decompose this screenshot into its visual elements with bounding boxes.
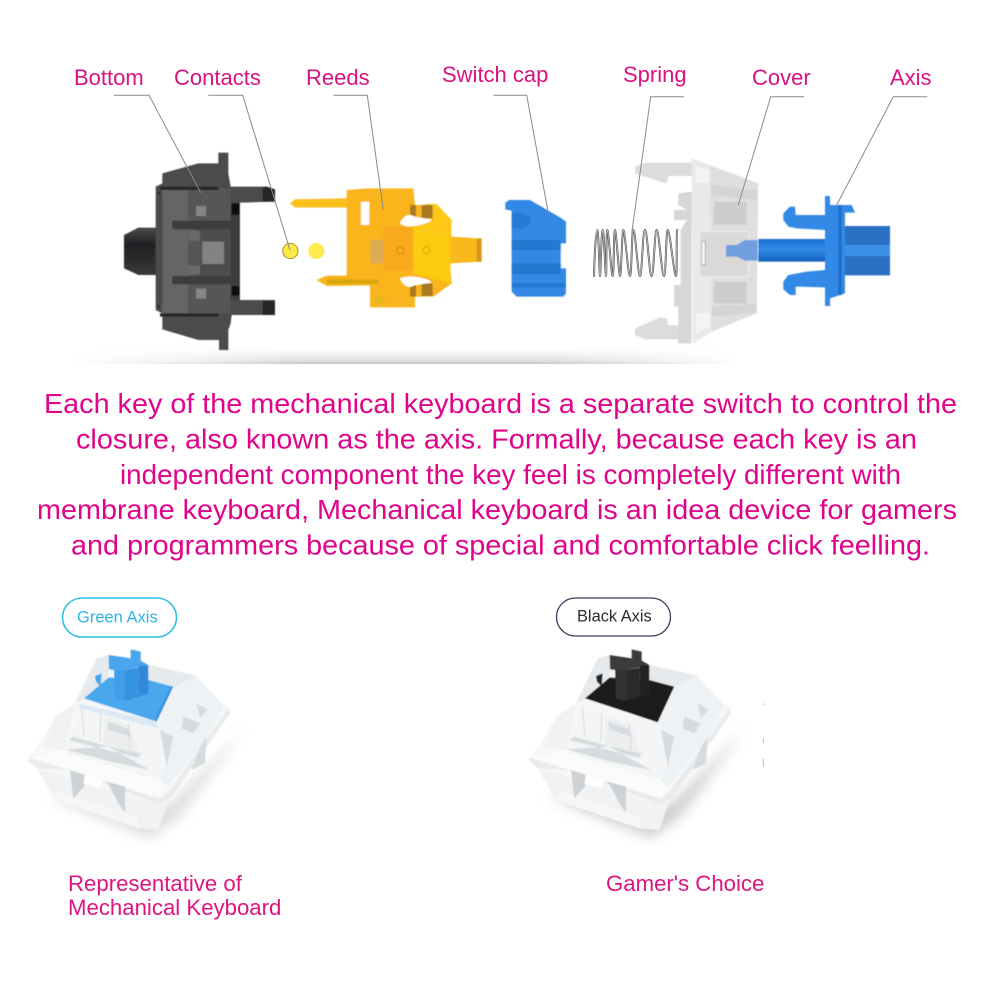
part: cover xyxy=(635,158,758,343)
leader line: Cover xyxy=(738,97,804,205)
switch: black axis xyxy=(528,649,763,838)
leader line: Spring xyxy=(632,97,684,233)
description paragraph: closure, also known as the axis. Formally, because each key is an xyxy=(76,424,917,454)
leader line: Contacts xyxy=(208,95,290,250)
switch: green axis (blue stem) xyxy=(27,649,243,838)
label: Contacts: Contacts xyxy=(174,65,261,90)
pill: Green Axis: Green Axis xyxy=(77,608,158,626)
description paragraph: independent component the key feel is completely different with xyxy=(120,459,901,490)
leader line: Axis xyxy=(837,97,927,205)
pill: Black Axis xyxy=(556,598,670,636)
part: switch cap xyxy=(505,200,566,297)
label: Reeds: Reeds xyxy=(306,65,370,90)
leader line: Bottom xyxy=(114,95,201,193)
label: Axis: Axis xyxy=(890,65,932,90)
ground shadow under exploded switch xyxy=(114,352,709,364)
caption: green axis xyxy=(68,871,281,920)
label: Bottom: Bottom xyxy=(74,65,144,90)
description paragraph: Each key of the mechanical keyboard is a separate switch to control the xyxy=(44,388,957,419)
description paragraph: membrane keyboard, Mechanical keyboard is an idea device for gamers xyxy=(37,494,957,525)
part: axis xyxy=(758,196,890,306)
caption: green axis: Mechanical Keyboard xyxy=(68,895,281,920)
leader line: Switch cap xyxy=(493,95,548,213)
pill: Black Axis: Black Axis xyxy=(577,608,652,626)
caption: green axis: Representative of xyxy=(68,871,243,896)
part: reeds xyxy=(290,188,482,307)
description paragraph: and programmers because of special and comfortable click feelling. xyxy=(71,530,930,560)
part: contacts xyxy=(283,243,324,259)
leader line: Reeds xyxy=(333,95,383,210)
part: spring xyxy=(594,230,677,276)
label: Cover: Cover xyxy=(752,65,811,90)
caption: black axis: Gamer's Choice xyxy=(606,871,764,896)
label: Spring: Spring xyxy=(623,62,687,87)
label: Switch cap: Switch cap xyxy=(442,62,548,87)
description paragraph xyxy=(37,388,957,560)
pill: Green Axis xyxy=(62,598,176,637)
part: bottom housing xyxy=(124,153,275,350)
